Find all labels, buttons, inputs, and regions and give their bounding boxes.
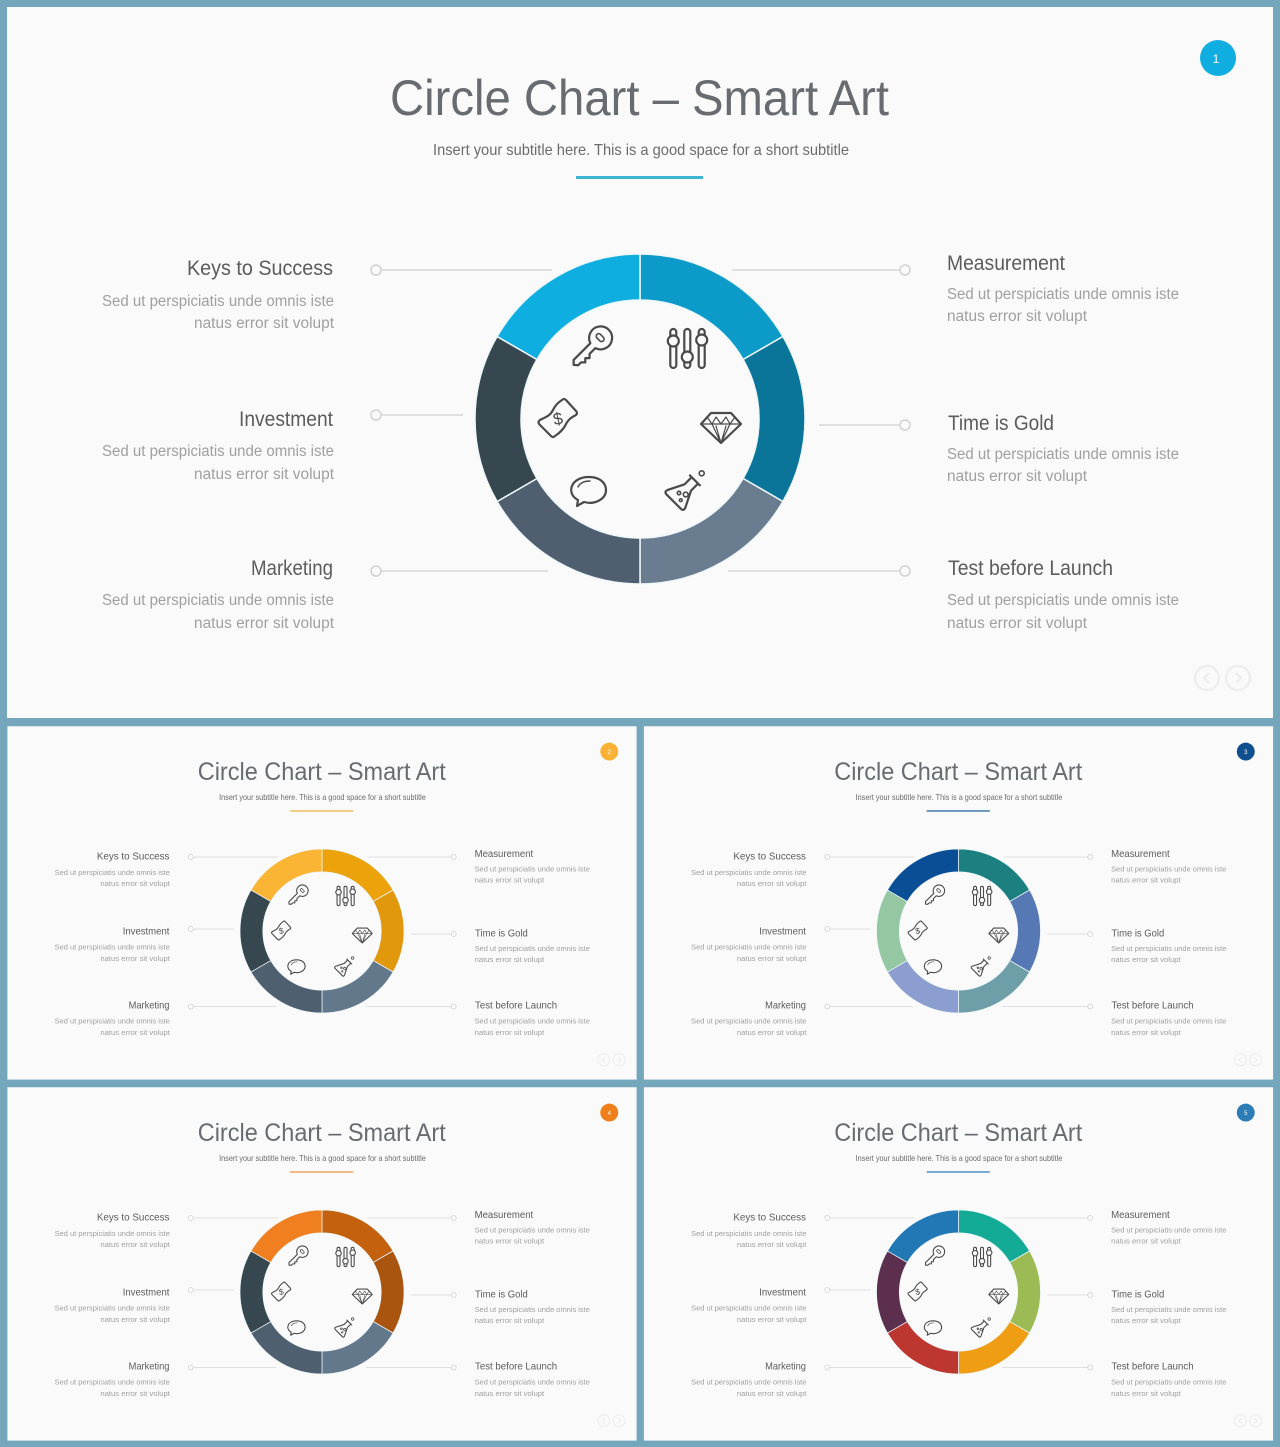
icon: speech bubble: [924, 1321, 942, 1335]
icon: flask: [665, 471, 704, 511]
page badge: 5: [1244, 1111, 1248, 1117]
icon: flask: [971, 1318, 990, 1338]
item: Test before Launch: Test before Launch: [475, 1001, 557, 1012]
panel: small slide, orange: [7, 1087, 637, 1441]
item: Measurement: natus error sit volupt: [1111, 1236, 1182, 1245]
item: Test before Launch: Sed ut perspiciatis unde omnis iste: [1111, 1377, 1226, 1386]
item: Measurement: Sed ut perspiciatis unde omnis iste: [475, 1225, 590, 1234]
item: Keys to Success: natus error sit volupt: [100, 1240, 171, 1249]
item: Investment: [691, 1287, 807, 1324]
subtitle: Insert your subtitle here. This is a good space for a short subtitle: [219, 1154, 426, 1163]
item: Marketing: natus error sit volupt: [194, 615, 335, 632]
connector lines: [371, 265, 910, 576]
panel: main slide, blue: [7, 7, 1273, 718]
donut chart: [240, 1210, 404, 1374]
item: Measurement: Measurement: [475, 1210, 533, 1221]
item: Measurement: [1111, 849, 1226, 884]
title: Circle Chart – Smart Art: [390, 70, 889, 126]
item: Measurement: natus error sit volupt: [475, 1236, 545, 1245]
icon: key: [921, 1244, 947, 1269]
title underline: [290, 810, 353, 812]
icon: money: $: [914, 925, 921, 936]
navigation arrows: [598, 1415, 625, 1427]
icon: money: $: [914, 1286, 921, 1297]
item: Time is Gold: natus error sit volupt: [1111, 1316, 1182, 1325]
icon: flask: [334, 1318, 354, 1338]
item: Time is Gold: natus error sit volupt: [947, 468, 1088, 485]
item: Time is Gold: Sed ut perspiciatis unde omnis iste: [475, 944, 590, 953]
item: Keys to Success: [55, 1212, 171, 1249]
item: Time is Gold: natus error sit volupt: [1111, 955, 1182, 964]
item: Investment: Investment: [759, 1287, 806, 1298]
icon: speech bubble: [288, 1321, 305, 1335]
item: Time is Gold: Time is Gold: [1112, 928, 1164, 939]
subtitle: Insert your subtitle here. This is a good space for a short subtitle: [856, 793, 1063, 802]
icon: sliders: [336, 1247, 355, 1267]
item: Marketing: [102, 557, 335, 632]
item: Marketing: [55, 1001, 171, 1037]
item: Measurement: natus error sit volupt: [475, 875, 545, 884]
title: Circle Chart – Smart Art: [834, 759, 1082, 786]
icon: money: [908, 1282, 927, 1301]
item: Measurement: natus error sit volupt: [947, 308, 1088, 325]
icon: key: [565, 322, 617, 373]
item: Test before Launch: natus error sit volupt: [947, 615, 1088, 632]
item: Keys to Success: Sed ut perspiciatis unde omnis iste: [102, 293, 334, 310]
item: Time is Gold: natus error sit volupt: [475, 1316, 545, 1325]
navigation arrows: [1195, 666, 1250, 690]
page badge: 1: [1213, 52, 1220, 66]
item: Marketing: natus error sit volupt: [100, 1028, 171, 1037]
item: Test before Launch: [475, 1362, 590, 1398]
item: Keys to Success: Keys to Success: [97, 1212, 169, 1223]
item: Marketing: Marketing: [129, 1362, 170, 1373]
icon: diamond: [989, 928, 1009, 943]
item: Time is Gold: Sed ut perspiciatis unde omnis iste: [475, 1305, 590, 1314]
item: Investment: Investment: [123, 926, 170, 937]
item: Keys to Success: [55, 851, 171, 888]
item: Measurement: [1111, 1210, 1226, 1245]
item: Investment: [102, 408, 335, 483]
item: Test before Launch: [947, 557, 1179, 632]
icon: money: [272, 921, 291, 940]
item: Keys to Success: natus error sit volupt: [194, 315, 335, 332]
item: Investment: natus error sit volupt: [194, 466, 335, 483]
item: Test before Launch: Sed ut perspiciatis unde omnis iste: [947, 592, 1179, 609]
item: Investment: Investment: [123, 1287, 170, 1298]
item: Keys to Success: Keys to Success: [187, 257, 333, 280]
item: Keys to Success: Keys to Success: [733, 851, 806, 862]
item: Marketing: Sed ut perspiciatis unde omnis iste: [691, 1016, 806, 1025]
item: Time is Gold: Time is Gold: [475, 1289, 528, 1300]
page badge: 2: [608, 750, 612, 756]
item: Investment: Sed ut perspiciatis unde omnis iste: [55, 1303, 170, 1312]
item: Investment: Sed ut perspiciatis unde omnis iste: [102, 443, 334, 460]
title underline: [576, 176, 703, 179]
page badge: [1237, 743, 1255, 761]
page badge: 3: [1244, 750, 1248, 756]
panel: small slide, multicolour: [644, 1087, 1273, 1441]
page badge: [600, 1104, 618, 1122]
title: Circle Chart – Smart Art: [198, 1120, 446, 1147]
item: Test before Launch: [1111, 1001, 1226, 1037]
item: Marketing: Marketing: [765, 1362, 806, 1373]
connector lines: [825, 1215, 1093, 1370]
item: Test before Launch: Sed ut perspiciatis unde omnis iste: [1111, 1016, 1226, 1025]
item: Test before Launch: Test before Launch: [475, 1362, 557, 1373]
item: Keys to Success: Sed ut perspiciatis unde omnis iste: [691, 868, 806, 877]
panel: small slide, navy and teal: [644, 726, 1273, 1080]
item: Keys to Success: natus error sit volupt: [737, 1240, 807, 1249]
item: Investment: Sed ut perspiciatis unde omnis iste: [55, 942, 170, 951]
item: Investment: Sed ut perspiciatis unde omnis iste: [691, 942, 806, 951]
item: Marketing: natus error sit volupt: [100, 1389, 171, 1398]
item: Investment: natus error sit volupt: [100, 1315, 171, 1324]
icon: key: [285, 883, 311, 908]
icon: sliders: [336, 886, 355, 906]
item: Test before Launch: [1111, 1362, 1226, 1398]
icon: money: [908, 921, 927, 940]
item: Marketing: Marketing: [765, 1001, 806, 1012]
donut chart: [475, 254, 805, 584]
title underline: [927, 1171, 990, 1173]
icon: money: [538, 399, 577, 437]
panel: small slide, amber: [7, 726, 637, 1080]
navigation arrows: [1234, 1054, 1262, 1066]
donut chart: [240, 849, 404, 1013]
item: Test before Launch: Test before Launch: [1112, 1362, 1194, 1373]
item: Time is Gold: Time is Gold: [1112, 1289, 1164, 1300]
item: Investment: natus error sit volupt: [737, 954, 807, 963]
donut chart: [876, 1210, 1041, 1374]
item: Keys to Success: [102, 257, 335, 332]
item: Keys to Success: [691, 851, 807, 888]
item: Investment: natus error sit volupt: [100, 954, 171, 963]
item: Keys to Success: Keys to Success: [97, 851, 169, 862]
connector lines: [825, 854, 1093, 1009]
item: Time is Gold: Time is Gold: [475, 928, 528, 939]
page badge: [1200, 40, 1236, 76]
icon: money: $: [278, 925, 285, 936]
icon: sliders: [668, 329, 707, 368]
item: Test before Launch: Sed ut perspiciatis unde omnis iste: [475, 1016, 590, 1025]
item: Time is Gold: [947, 412, 1179, 485]
item: Measurement: Measurement: [1111, 849, 1170, 860]
item: Time is Gold: [1111, 1289, 1226, 1325]
navigation arrows: [598, 1054, 625, 1066]
item: Marketing: natus error sit volupt: [737, 1389, 807, 1398]
item: Measurement: [475, 849, 590, 884]
item: Keys to Success: Sed ut perspiciatis unde omnis iste: [55, 868, 170, 877]
item: Investment: natus error sit volupt: [737, 1315, 807, 1324]
title underline: [290, 1171, 353, 1173]
navigation arrows: [1234, 1415, 1262, 1427]
item: Test before Launch: natus error sit volupt: [1111, 1028, 1182, 1037]
item: Keys to Success: [691, 1212, 807, 1249]
item: Time is Gold: [475, 928, 590, 964]
item: Time is Gold: Time is Gold: [948, 412, 1054, 435]
item: Measurement: Measurement: [1111, 1210, 1170, 1221]
icon: speech bubble: [571, 477, 606, 506]
item: Test before Launch: [475, 1001, 590, 1037]
item: Measurement: Measurement: [475, 849, 533, 860]
item: Marketing: Marketing: [251, 557, 333, 580]
subtitle: Insert your subtitle here. This is a good space for a short subtitle: [856, 1154, 1063, 1163]
icon: flask: [334, 957, 354, 977]
icon: diamond: [701, 413, 741, 443]
subtitle: Insert your subtitle here. This is a good space for a short subtitle: [219, 793, 426, 802]
item: Marketing: Sed ut perspiciatis unde omnis iste: [55, 1377, 170, 1386]
subtitle: Insert your subtitle here. This is a good space for a short subtitle: [433, 142, 849, 159]
item: Time is Gold: natus error sit volupt: [475, 955, 545, 964]
page badge: 4: [608, 1111, 612, 1117]
page badge: [600, 743, 618, 761]
item: Investment: [691, 926, 807, 963]
icon: money: $: [278, 1286, 285, 1297]
title: Circle Chart – Smart Art: [198, 759, 446, 786]
item: Measurement: Sed ut perspiciatis unde omnis iste: [1111, 1225, 1226, 1234]
icon: flask: [971, 957, 990, 977]
item: Time is Gold: Sed ut perspiciatis unde omnis iste: [1111, 944, 1226, 953]
item: Marketing: Sed ut perspiciatis unde omnis iste: [691, 1377, 806, 1386]
item: Time is Gold: Sed ut perspiciatis unde omnis iste: [1111, 1305, 1226, 1314]
item: Test before Launch: Sed ut perspiciatis unde omnis iste: [475, 1377, 590, 1386]
donut chart: [876, 849, 1041, 1013]
item: Marketing: [691, 1362, 807, 1398]
icon: diamond: [352, 1289, 372, 1304]
item: Measurement: [947, 252, 1179, 325]
item: Test before Launch: natus error sit volupt: [475, 1389, 545, 1398]
connector lines: [188, 1215, 456, 1370]
item: Test before Launch: natus error sit volupt: [475, 1028, 545, 1037]
connector lines: [188, 854, 456, 1009]
item: Investment: Investment: [239, 408, 333, 431]
item: Test before Launch: Test before Launch: [948, 557, 1113, 580]
item: Keys to Success: natus error sit volupt: [737, 879, 807, 888]
icon: money: $: [551, 409, 565, 429]
icon: speech bubble: [924, 960, 942, 974]
title: Circle Chart – Smart Art: [834, 1120, 1082, 1147]
icon: key: [921, 883, 947, 908]
item: Time is Gold: Sed ut perspiciatis unde omnis iste: [947, 446, 1179, 463]
item: Measurement: natus error sit volupt: [1111, 875, 1182, 884]
item: Marketing: Marketing: [129, 1001, 170, 1012]
item: Marketing: [691, 1001, 807, 1037]
icon: sliders: [972, 886, 992, 906]
item: Time is Gold: [475, 1289, 590, 1325]
item: Measurement: Sed ut perspiciatis unde omnis iste: [947, 286, 1179, 303]
item: Keys to Success: Keys to Success: [733, 1212, 806, 1223]
icon: sliders: [972, 1247, 992, 1267]
icon: diamond: [352, 928, 372, 943]
page badge: [1237, 1104, 1255, 1122]
item: Investment: [55, 926, 171, 963]
item: Measurement: [475, 1210, 590, 1245]
item: Measurement: Measurement: [947, 252, 1065, 275]
item: Investment: [55, 1287, 171, 1324]
item: Marketing: natus error sit volupt: [737, 1028, 807, 1037]
icon: key: [285, 1244, 311, 1269]
item: Investment: Sed ut perspiciatis unde omnis iste: [691, 1303, 806, 1312]
item: Measurement: Sed ut perspiciatis unde omnis iste: [475, 864, 590, 873]
item: Measurement: Sed ut perspiciatis unde omnis iste: [1111, 864, 1226, 873]
item: Test before Launch: natus error sit volupt: [1111, 1389, 1182, 1398]
item: Keys to Success: Sed ut perspiciatis unde omnis iste: [691, 1229, 806, 1238]
icon: money: [272, 1282, 291, 1301]
icon: diamond: [989, 1289, 1009, 1304]
item: Keys to Success: Sed ut perspiciatis unde omnis iste: [55, 1229, 170, 1238]
item: Keys to Success: natus error sit volupt: [100, 879, 171, 888]
icon: speech bubble: [288, 960, 305, 974]
item: Marketing: [55, 1362, 171, 1398]
item: Time is Gold: [1111, 928, 1226, 964]
item: Investment: Investment: [759, 926, 806, 937]
item: Test before Launch: Test before Launch: [1112, 1001, 1194, 1012]
item: Marketing: Sed ut perspiciatis unde omnis iste: [102, 592, 334, 609]
item: Marketing: Sed ut perspiciatis unde omnis iste: [55, 1016, 170, 1025]
title underline: [927, 810, 990, 812]
